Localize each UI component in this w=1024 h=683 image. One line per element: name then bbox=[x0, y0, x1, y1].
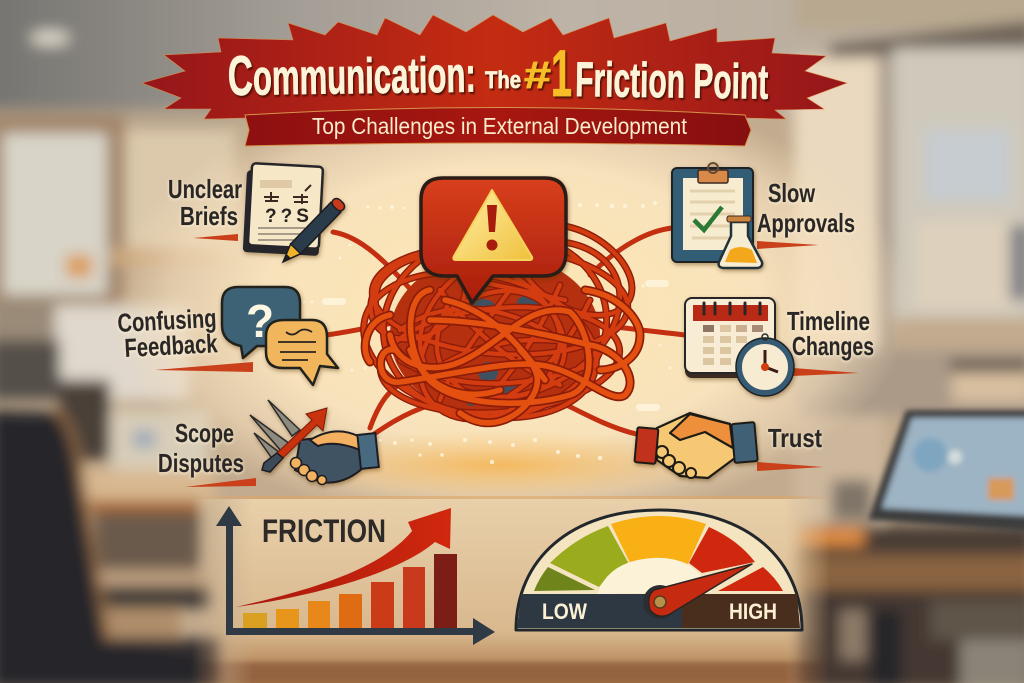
title text: The bbox=[485, 67, 521, 94]
high label: HIGH bbox=[729, 599, 777, 624]
front loops bbox=[365, 290, 640, 423]
friction bar chart bbox=[216, 506, 495, 645]
accent stroke bbox=[757, 241, 819, 249]
warning triangle bbox=[453, 190, 532, 260]
warning speech bubble bbox=[421, 178, 566, 303]
icon: speech bubbles: ? bbox=[246, 295, 274, 347]
item: Slow Approvals bbox=[672, 163, 855, 268]
gauge base bbox=[517, 594, 682, 628]
bubble bbox=[421, 178, 566, 303]
label: Trust bbox=[768, 423, 822, 453]
icon: handshake bbox=[634, 413, 758, 478]
label: Approvals bbox=[757, 208, 855, 238]
label: Scope bbox=[175, 418, 234, 448]
label bbox=[158, 418, 244, 478]
accent stroke bbox=[757, 462, 823, 471]
accent stroke bbox=[185, 478, 256, 487]
accent stroke bbox=[793, 368, 859, 376]
label: friction: FRICTION bbox=[262, 513, 386, 549]
exclamation mark bbox=[486, 205, 498, 250]
icon: document and pencil: ??S bbox=[265, 206, 313, 227]
back loops bbox=[350, 206, 648, 446]
label: Unclear bbox=[168, 174, 242, 204]
item: Timeline Changes bbox=[685, 298, 874, 396]
label bbox=[757, 178, 855, 238]
label: Confusing bbox=[117, 303, 217, 338]
banner starburst bbox=[142, 15, 847, 119]
accent stroke bbox=[155, 362, 253, 372]
label bbox=[787, 306, 874, 361]
connector lines bbox=[326, 228, 685, 445]
title text: 1 bbox=[551, 36, 572, 110]
item: Unclear Briefs bbox=[168, 163, 347, 267]
label: Feedback bbox=[124, 328, 219, 363]
icon: handshake with arrow and blades bbox=[250, 400, 379, 484]
bars bbox=[243, 554, 457, 628]
gauge segments bbox=[534, 516, 783, 594]
label bbox=[168, 174, 242, 231]
label bbox=[117, 303, 219, 363]
item: Scope Disputes bbox=[158, 400, 379, 487]
bottom plaster panel bbox=[195, 496, 828, 683]
label: Briefs bbox=[180, 201, 238, 231]
title text: Friction Point bbox=[575, 53, 769, 110]
subtitle ribbon bbox=[245, 108, 751, 146]
rising arrow bbox=[236, 508, 451, 607]
item: Trust bbox=[634, 413, 823, 478]
item: Confusing Feedback bbox=[117, 287, 338, 385]
label: Changes bbox=[792, 331, 874, 361]
dark core gaps bbox=[466, 294, 553, 406]
label: Disputes bbox=[158, 448, 244, 478]
icon: speech bubbles bbox=[222, 287, 338, 385]
tangle of red connectors bbox=[326, 206, 685, 446]
label: Slow bbox=[768, 178, 816, 208]
title text: # bbox=[524, 55, 551, 97]
title banner bbox=[142, 15, 847, 146]
gauge body bbox=[516, 510, 802, 630]
friction gauge bbox=[516, 510, 802, 630]
tangle fill bbox=[390, 253, 600, 417]
icon: calendar and clock bbox=[685, 298, 794, 396]
title text bbox=[227, 36, 769, 110]
axes bbox=[216, 506, 495, 645]
needle bbox=[643, 564, 752, 619]
title text: Communication: bbox=[227, 41, 476, 107]
accent stroke bbox=[193, 234, 238, 241]
subtitle: Top Challenges in External Development bbox=[312, 113, 688, 139]
low label: LOW bbox=[542, 599, 587, 624]
dotted light traces bbox=[302, 201, 672, 464]
icon: clipboard and flask bbox=[672, 163, 762, 268]
label: Timeline bbox=[787, 306, 870, 336]
icon: document and pencil bbox=[243, 163, 347, 267]
